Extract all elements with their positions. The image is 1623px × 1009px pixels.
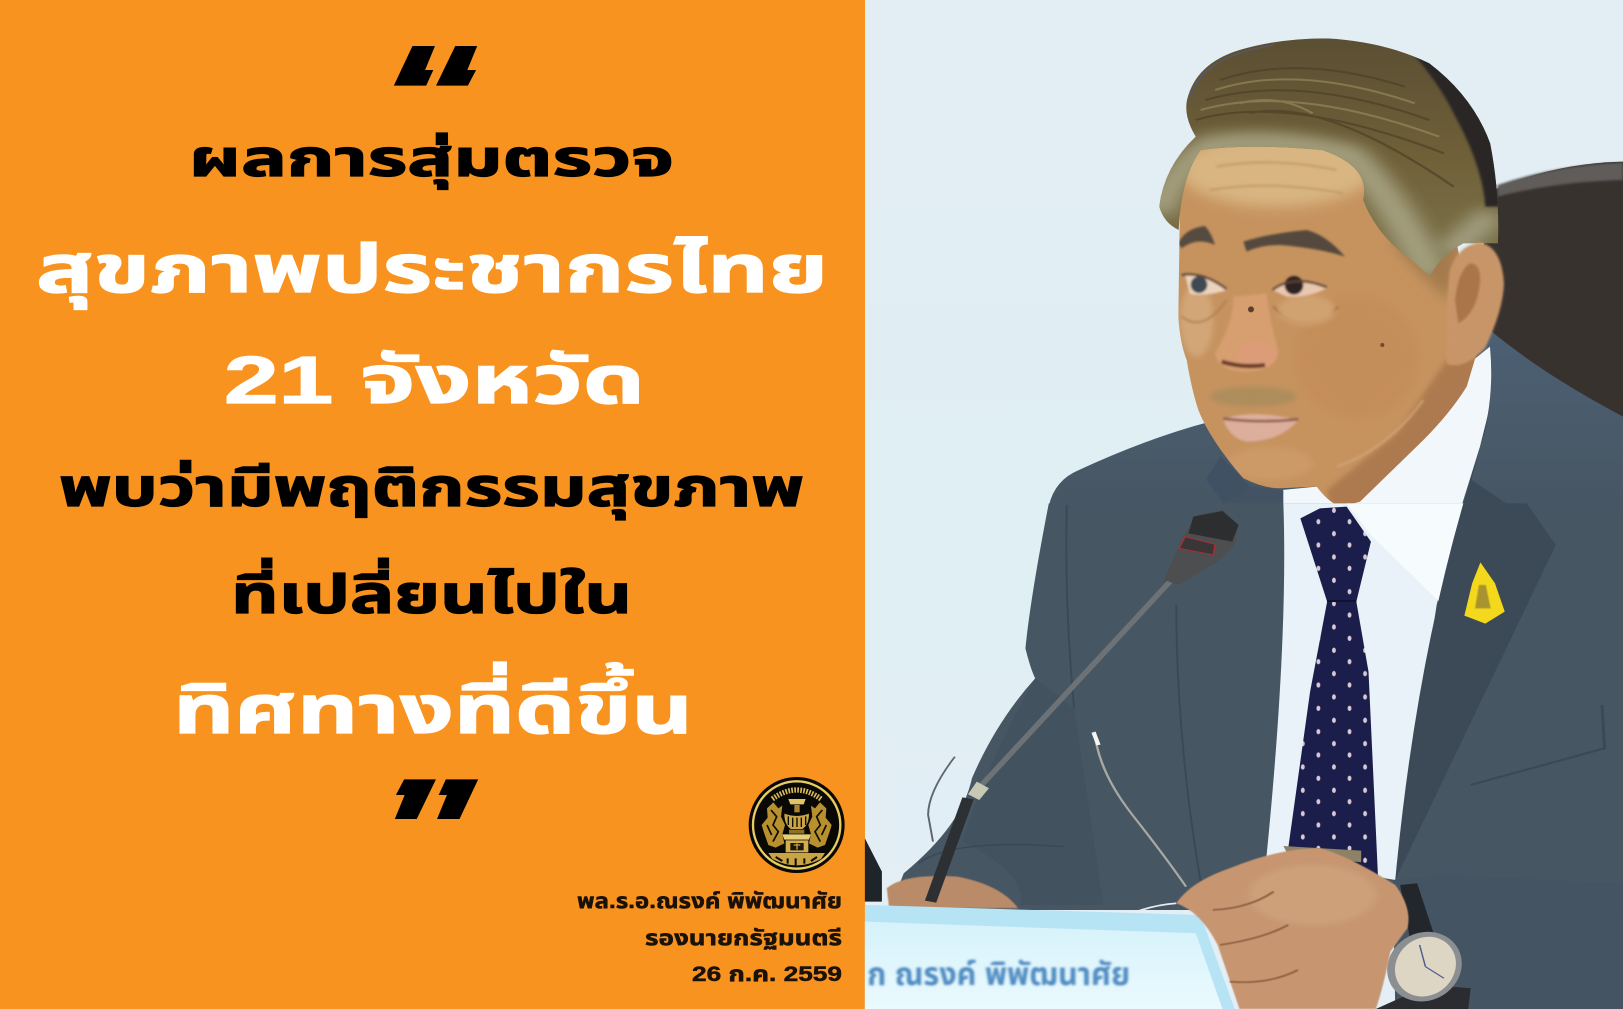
mole xyxy=(1248,306,1254,312)
offering bowl xyxy=(788,799,806,804)
photo: chair and shoulders xyxy=(1049,162,1623,506)
watch xyxy=(1376,883,1471,1009)
forehead creases xyxy=(1210,162,1343,193)
heading line: white province count: 21 จังหวัด xyxy=(224,343,645,418)
jaw crease xyxy=(1337,400,1423,467)
heading line: white: สุขภาพประชากรไทย xyxy=(36,232,828,310)
shirt collar xyxy=(1347,503,1463,602)
icon: opening quotation mark xyxy=(394,46,477,86)
neck shadow xyxy=(1327,357,1483,510)
tie clip xyxy=(1283,846,1361,862)
photo: lower body, microphone and name plate xyxy=(865,503,1623,1009)
text: speaker role: รองนายกรัฐมนตรี xyxy=(645,927,842,950)
panel: orange quote background xyxy=(0,0,865,1009)
right sleeve xyxy=(1393,876,1623,1009)
dark back of the hair xyxy=(1414,56,1498,208)
left hand xyxy=(887,876,1018,908)
shirt collar xyxy=(1282,347,1491,522)
stray hair strand xyxy=(1191,45,1274,97)
right lapel xyxy=(1395,503,1556,880)
photo: hair xyxy=(1152,33,1502,280)
icon: government emblem seal xyxy=(749,777,845,873)
text: date: 26 ก.ค. 2559 xyxy=(692,963,842,986)
right cheek warm xyxy=(1293,293,1420,420)
name plate: ก ณรงค์ พิพัฒนาศัย xyxy=(867,957,1130,992)
nose xyxy=(1215,293,1278,372)
right guardian lion xyxy=(808,802,832,848)
face and neck xyxy=(1178,146,1476,504)
heading line: black behaviour: พบว่ามีพฤติกรรมสุขภาพ xyxy=(59,459,804,520)
lips xyxy=(1223,414,1298,442)
icon: necktie xyxy=(1288,507,1378,882)
left eye xyxy=(1182,274,1227,295)
text: speaker name: พล.ร.อ.ณรงค์ พิพัฒนาศัย xyxy=(577,890,842,913)
forehead light xyxy=(1185,146,1364,211)
desk object xyxy=(865,838,882,902)
name plate xyxy=(865,905,1235,1009)
icon: gold lapel pin xyxy=(1464,562,1505,624)
freckle xyxy=(1380,343,1384,347)
right eyebrow xyxy=(1243,230,1345,257)
right eye xyxy=(1273,276,1327,297)
right hand xyxy=(1176,848,1409,1009)
finger creases xyxy=(1213,892,1298,982)
jacket xyxy=(889,503,1623,910)
heading line: white direction: ทิศทางที่ดีขึ้น xyxy=(173,662,693,748)
suit shoulders xyxy=(1049,328,1623,506)
hair strands xyxy=(1196,68,1454,187)
icon: microphone xyxy=(931,510,1239,902)
icon: closing quotation mark xyxy=(395,779,478,819)
pocket xyxy=(1471,705,1604,785)
hairline grey glow xyxy=(1157,143,1432,277)
icon: eyeglass temples xyxy=(928,732,1186,915)
left eyebrow xyxy=(1178,226,1215,248)
photo: face and collar xyxy=(1178,146,1505,504)
chair back xyxy=(1468,162,1623,440)
right lapel xyxy=(1458,413,1528,522)
moustache shade xyxy=(1210,387,1297,407)
left lapel xyxy=(1206,456,1250,504)
left cheek light xyxy=(1180,283,1213,357)
heading line: black change: ที่เปลี่ยนไปใน xyxy=(231,558,632,625)
left sleeve shading xyxy=(962,678,1103,905)
jacket seams xyxy=(918,505,1201,882)
pedestal xyxy=(782,834,811,840)
left guardian lion xyxy=(762,802,785,848)
photo: ear xyxy=(1446,243,1504,365)
panel: photo of the speaker xyxy=(865,0,1623,1009)
heading line: black: ผลการสุ่มตรวจ xyxy=(189,130,674,189)
eye socket shading xyxy=(1272,306,1339,314)
chin xyxy=(1227,458,1242,476)
top arc of rays xyxy=(772,790,821,799)
knuckle highlight xyxy=(1249,865,1376,925)
hair shade by temple xyxy=(1392,245,1459,299)
tie knot line xyxy=(1327,598,1356,604)
base xyxy=(768,853,825,865)
shirt xyxy=(1266,503,1463,880)
